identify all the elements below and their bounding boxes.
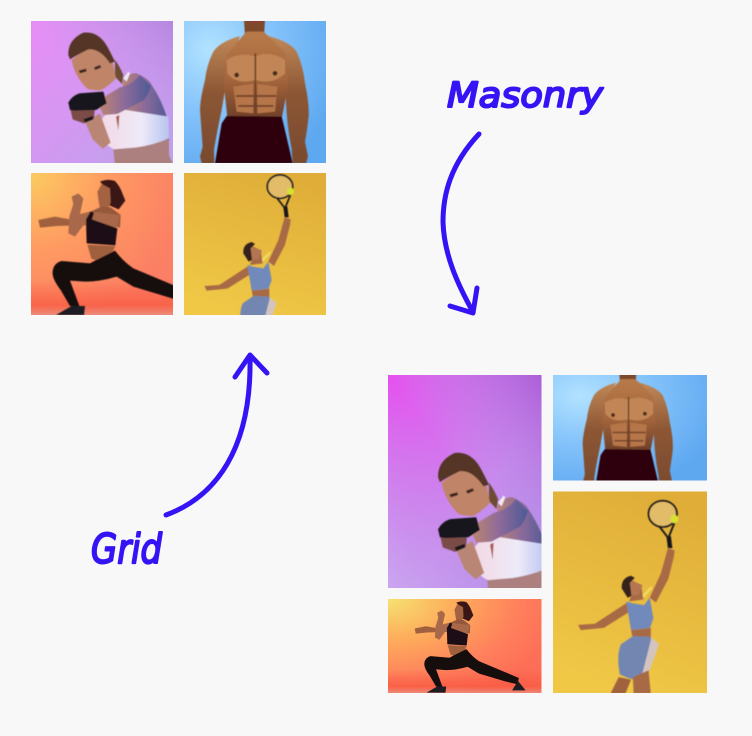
arrow: grid label up to grid layout bbox=[166, 355, 267, 515]
grid tile: tennis player bbox=[184, 173, 326, 315]
grid tile: lunging woman bbox=[31, 173, 173, 315]
grid tile: muscular man bbox=[184, 20, 326, 163]
masonry tile: tennis player bbox=[553, 492, 707, 693]
masonry tile: muscular man bbox=[553, 375, 707, 480]
grid tile: boxer bbox=[31, 21, 174, 167]
masonry tile: boxer bbox=[388, 375, 542, 588]
arrow: masonry label down to masonry layout bbox=[443, 134, 479, 313]
heading: Grid: Grid bbox=[91, 525, 163, 573]
panel: masonry layout bbox=[388, 369, 707, 693]
panel: grid layout bbox=[31, 21, 326, 315]
heading: Masonry: Masonry bbox=[447, 76, 604, 116]
masonry tile: lunging woman bbox=[388, 599, 542, 693]
